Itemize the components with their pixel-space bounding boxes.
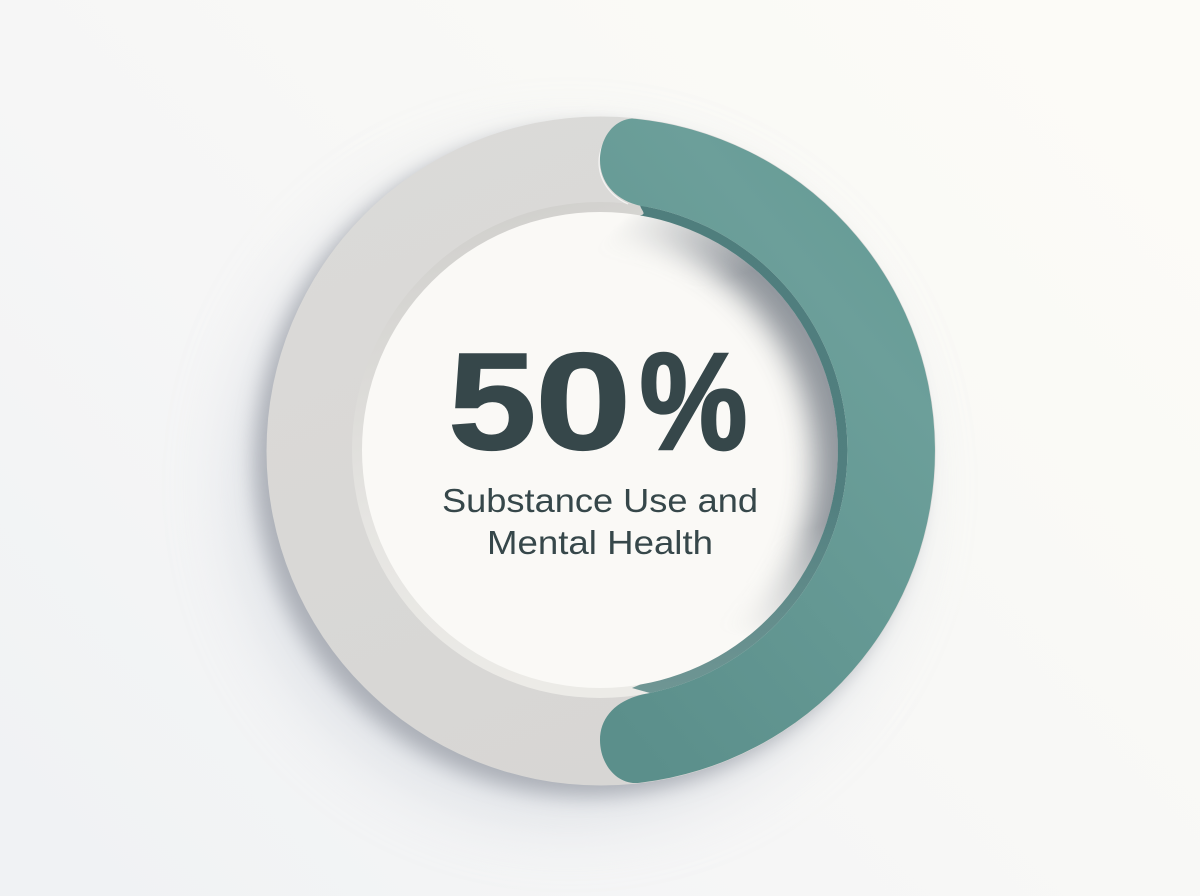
big number: 5 bbox=[448, 324, 537, 479]
big number: % bbox=[640, 324, 747, 479]
teal arc: 50 percent segment bbox=[599, 118, 935, 783]
donut infographic bbox=[203, 115, 936, 850]
teal top face bbox=[600, 118, 935, 783]
hole shadow bbox=[630, 216, 838, 626]
ring shadow bbox=[236, 128, 922, 819]
label: Mental Health bbox=[487, 524, 713, 561]
label: Substance Use and bbox=[442, 482, 758, 519]
centre hole bbox=[362, 212, 838, 688]
teal inner wall bbox=[632, 204, 847, 693]
cap highlight bbox=[599, 130, 628, 204]
big number: 0 bbox=[535, 325, 631, 479]
ring inner bevel bbox=[352, 202, 848, 698]
label bbox=[442, 482, 758, 561]
big number bbox=[448, 324, 747, 479]
gray ring bbox=[266, 100, 936, 800]
